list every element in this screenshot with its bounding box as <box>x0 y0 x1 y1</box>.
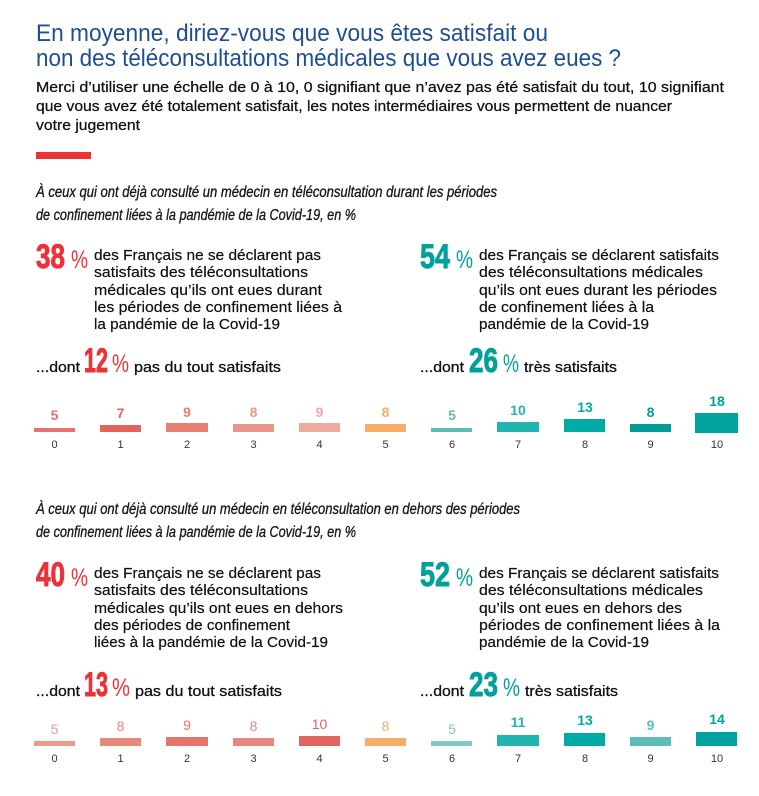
title: non des téléconsultations médicales que vous avez eues ? <box>36 45 621 72</box>
title: En moyenne, diriez-vous que vous êtes satisfait ou <box>36 20 548 47</box>
section 1 left stat: 38 % not satisfied: % <box>71 246 88 274</box>
section 1 heading <box>35 184 497 224</box>
section 1 bar chart: 18 <box>709 393 725 409</box>
section 2 sub-stat: 13 %: ...dont <box>36 683 81 700</box>
section 1 right stat: 54 % satisfied: pandémie de la Covid-19 <box>479 317 649 333</box>
section 1 left stat: 38 % not satisfied <box>36 238 343 333</box>
section 1 bar chart: 8 <box>382 404 390 420</box>
section 2 right stat: 52 % satisfied: périodes de confinement liées à la <box>479 618 721 634</box>
section 2 bar chart: 3 <box>250 753 257 765</box>
section 2 bar chart: 1 <box>117 753 124 765</box>
section 1 bar chart: 8 <box>250 404 258 420</box>
section 1 bar chart: 5 <box>382 439 389 451</box>
section 1 right stat: 54 % satisfied: des téléconsultations médicales <box>479 265 703 281</box>
section 2 bar chart: 6 <box>449 753 455 765</box>
section 1 left stat: 38 % not satisfied: la pandémie de la Covid-19 <box>94 317 280 333</box>
section 2 left stat: 40 % not satisfied: satisfaits des téléconsultations <box>94 583 308 599</box>
section 2 bar chart: 10 <box>312 716 327 732</box>
section 2 right stat: 52 % satisfied: % <box>456 564 473 592</box>
section 1 heading: À ceux qui ont déjà consulté un médecin en téléconsultation durant les périodes <box>35 184 497 201</box>
red accent bar <box>36 152 91 159</box>
subtitle: scale instructions: que vous avez été totalement satisfait, les notes intermédiaires vous permettent de nuancer <box>36 99 672 115</box>
section 1 bar chart: 1 <box>117 439 124 451</box>
section 2 left stat: 40 % not satisfied <box>36 556 343 651</box>
section 2 sub-stat: 23 %: très satisfaits <box>525 683 618 700</box>
section 1 left stat: 38 % not satisfied: les périodes de confinement liées à <box>94 300 343 316</box>
section 1 sub-stat: 12 %: pas du tout satisfaits <box>134 359 281 376</box>
section 1 right stat: 54 % satisfied <box>420 238 719 333</box>
section 2 heading <box>35 501 520 541</box>
title <box>36 20 621 72</box>
section 2 sub-stat: 23 %: % <box>503 674 520 702</box>
section 2 sub-stat: 13 %: % <box>112 674 130 702</box>
section 2 bar chart: 11 <box>511 714 526 730</box>
section 1 left stat: 38 % not satisfied: médicales qu’ils ont eues durant <box>94 283 322 299</box>
section 1 bar chart: 10 <box>711 439 723 451</box>
section 2 sub-stat: 13 %: pas du tout satisfaits <box>135 683 282 700</box>
section 1 bar chart: 4 <box>316 439 323 451</box>
section 2 left stat: 40 % not satisfied: des périodes de confinement <box>94 618 290 634</box>
section 2 left stat: 40 % not satisfied: % <box>71 564 88 592</box>
section 1 bar chart <box>34 393 738 451</box>
section 2 left stat: 40 % not satisfied: liées à la pandémie de la Covid-19 <box>94 635 328 651</box>
section 1 bar chart: 6 <box>449 439 455 451</box>
section 2 right stat: 52 % satisfied: qu’ils ont eues en dehors des <box>479 601 682 617</box>
section 2 bar chart: 9 <box>647 717 655 733</box>
section 2 bar chart: 5 <box>382 753 389 765</box>
section 1 right stat: 54 % satisfied: 54 <box>420 238 450 276</box>
section 2 right stat: 52 % satisfied <box>420 556 721 651</box>
section 1 right stat: 54 % satisfied: % <box>456 246 473 274</box>
section 2 sub-stat: 23 %: ...dont <box>420 683 465 700</box>
section 1 bar chart: 13 <box>577 399 593 415</box>
section 2 bar chart: 2 <box>184 753 190 765</box>
section 2 bar chart: 8 <box>250 718 258 734</box>
subtitle: scale instructions: votre jugement <box>36 118 140 134</box>
section 2 bar chart: 13 <box>577 712 593 728</box>
section 2 bar chart: 8 <box>117 718 125 734</box>
section 2 bar chart: 4 <box>316 753 323 765</box>
section 2 left stat: 40 % not satisfied: des Français ne se déclarent pas <box>94 566 321 582</box>
section 1 right stat: 54 % satisfied: qu’ils ont eues durant les périodes <box>479 283 717 299</box>
section 1 bar chart: 5 <box>448 407 456 423</box>
section 1 sub-stat: 26 %: ...dont <box>420 359 465 376</box>
section 1 bar chart: 7 <box>515 439 521 451</box>
section 1 left stat: 38 % not satisfied: 38 <box>36 238 65 276</box>
section 1 bar chart: 9 <box>647 439 654 451</box>
section 2 bar chart <box>34 711 737 765</box>
section 1 sub-stat: 12 %: % <box>112 350 129 378</box>
section 2 bar chart: 5 <box>448 721 456 737</box>
section 2 right stat: 52 % satisfied: pandémie de la Covid-19 <box>479 635 649 651</box>
section 1 sub-stat: 26 % <box>420 342 617 380</box>
section 1 heading: de confinement liées à la pandémie de la Covid-19, en % <box>36 207 356 224</box>
section 1 right stat: 54 % satisfied: de confinement liées à la <box>479 300 655 316</box>
section 2 bar chart: 0 <box>51 753 58 765</box>
section 2 bar chart: 5 <box>51 721 59 737</box>
section 1 bar chart: 9 <box>316 404 324 420</box>
subtitle: scale instructions <box>36 80 724 134</box>
section 2 bar chart: 9 <box>183 717 191 733</box>
section 2 right stat: 52 % satisfied: des téléconsultations médicales <box>479 583 703 599</box>
section 2 heading: de confinement liées à la pandémie de la Covid-19, en % <box>36 524 356 541</box>
section 1 sub-stat: 12 % <box>36 342 281 380</box>
subtitle: scale instructions: Merci d’utiliser une échelle de 0 à 10, 0 signifiant que n’avez pas été satisfait du tout, 10 signifiant <box>36 80 724 96</box>
section 2 sub-stat: 23 %: 23 <box>469 666 498 704</box>
section 1 sub-stat: 26 %: 26 <box>469 342 498 380</box>
section 2 right stat: 52 % satisfied: 52 <box>420 556 450 594</box>
section 1 bar chart: 7 <box>117 405 125 421</box>
section 2 sub-stat: 13 %: 13 <box>84 666 108 704</box>
section 1 bar chart: 2 <box>184 439 190 451</box>
section 2 bar chart: 8 <box>382 718 390 734</box>
section 2 bar chart: 9 <box>647 753 654 765</box>
section 1 bar chart: 10 <box>510 402 526 418</box>
section 2 heading: À ceux qui ont déjà consulté un médecin en téléconsultation en dehors des périodes <box>35 501 520 518</box>
section 2 sub-stat: 13 % <box>36 666 282 704</box>
section 1 right stat: 54 % satisfied: des Français se déclarent satisfaits <box>479 248 719 264</box>
section 2 sub-stat: 23 % <box>420 666 618 704</box>
section 1 sub-stat: 12 %: 12 <box>84 342 108 380</box>
section 2 bar chart: 7 <box>515 753 521 765</box>
section 1 left stat: 38 % not satisfied: satisfaits des téléconsultations <box>94 265 308 281</box>
section 2 bar chart: 8 <box>582 753 588 765</box>
section 1 bar chart: 3 <box>250 439 257 451</box>
section 1 bar chart: 5 <box>51 407 59 423</box>
section 2 left stat: 40 % not satisfied: médicales qu’ils ont eues en dehors <box>94 601 343 617</box>
section 2 right stat: 52 % satisfied: des Français se déclarent satisfaits <box>479 566 719 582</box>
section 2 bar chart: 14 <box>709 711 725 727</box>
section 2 left stat: 40 % not satisfied: 40 <box>36 556 65 594</box>
section 2 bar chart: 10 <box>711 753 723 765</box>
section 1 sub-stat: 26 %: très satisfaits <box>524 359 617 376</box>
section 1 bar chart: 9 <box>183 404 191 420</box>
section 1 bar chart: 8 <box>582 439 588 451</box>
section 1 bar chart: 8 <box>647 404 655 420</box>
section 1 sub-stat: 12 %: ...dont <box>36 359 81 376</box>
section 1 sub-stat: 26 %: % <box>503 350 519 378</box>
section 1 bar chart: 0 <box>51 439 58 451</box>
section 1 left stat: 38 % not satisfied: des Français ne se déclarent pas <box>94 248 321 264</box>
